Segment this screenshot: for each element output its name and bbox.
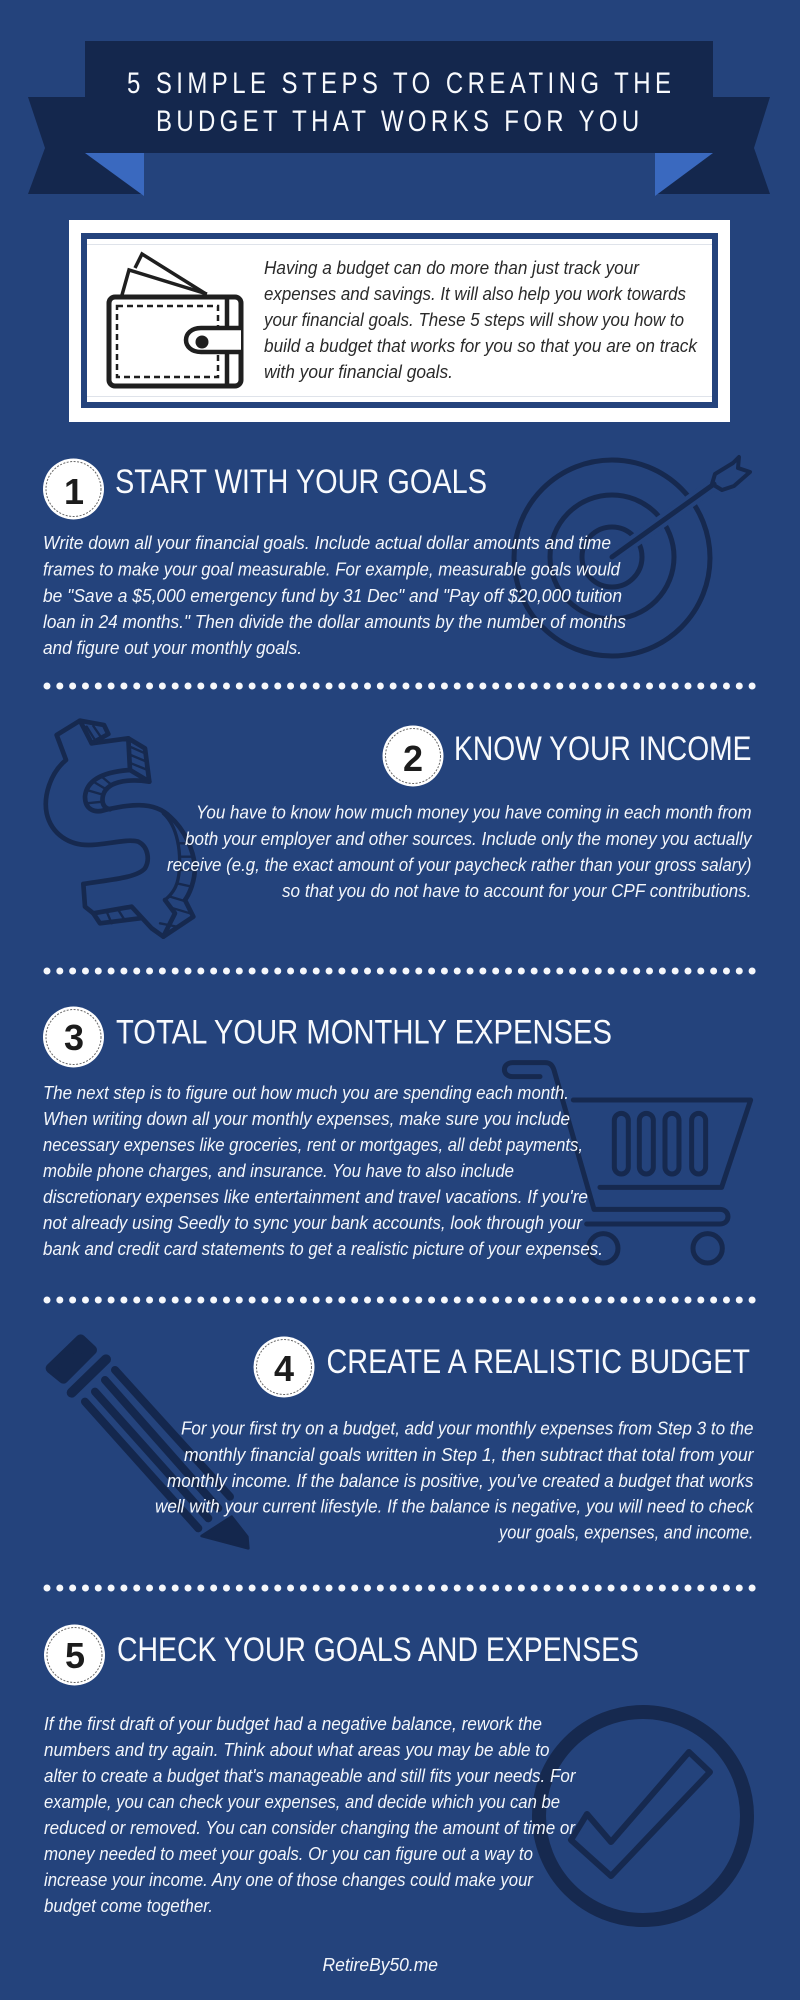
icon: pencil	[51, 1339, 248, 1548]
heading: CHECK YOUR GOALS AND EXPENSES	[117, 1631, 639, 1669]
body text: monthly financial goals written in Step 1, then subtract that total from your	[184, 1445, 754, 1465]
body text: alter to create a budget that's manageable and still fits your needs. For	[44, 1766, 576, 1786]
body text: increase your income. Any one of those changes could make your	[44, 1870, 534, 1890]
step number badge: 4	[274, 1348, 294, 1389]
body text: loan in 24 months." Then divide the dollar amounts by the number of months	[43, 612, 626, 632]
body text: You have to know how much money you have coming in each month from	[196, 802, 752, 822]
body text: mobile phone charges, and insurance. You have to also include	[43, 1161, 514, 1181]
body text: money needed to meet your goals. Or you can figure out a way to	[44, 1844, 533, 1864]
body text: If the first draft of your budget had a negative balance, rework the	[44, 1714, 542, 1734]
right ribbon wing	[655, 97, 770, 194]
body text: Write down all your financial goals. Include actual dollar amounts and time	[43, 533, 611, 553]
footer credit: RetireBy50.me	[322, 1955, 438, 1975]
main ribbon band	[85, 41, 713, 153]
panel: step 3	[43, 1006, 751, 1263]
intro text	[262, 258, 698, 382]
white card	[69, 220, 730, 422]
body text: When writing down all your monthly expenses, make sure you include	[43, 1109, 570, 1129]
body text: be "Save a $5,000 emergency fund by 31 Dec" and "Pay off $20,000 tuition	[43, 586, 622, 606]
body text: For your first try on a budget, add your monthly expenses from Step 3 to the	[181, 1418, 754, 1438]
intro text: with your financial goals.	[264, 362, 453, 382]
title text: 5 SIMPLE STEPS TO CREATING THE	[127, 65, 671, 100]
left ribbon wing	[28, 97, 144, 194]
step number badge: 3	[64, 1017, 84, 1058]
panel: step 5	[44, 1624, 747, 1920]
title banner	[28, 41, 770, 196]
icon: wallet	[109, 254, 241, 386]
blue frame	[84, 236, 715, 405]
intro text: your financial goals. These 5 steps will show you how to	[262, 310, 684, 330]
title text	[127, 65, 671, 138]
step number badge	[254, 1336, 314, 1398]
body text: monthly income. If the balance is positive, you've created a budget that works	[167, 1471, 754, 1491]
body text: and figure out your monthly goals.	[43, 638, 302, 658]
panel: step 2	[46, 721, 752, 937]
body text: so that you do not have to account for your CPF contributions.	[282, 881, 752, 901]
step number badge	[43, 458, 104, 520]
panel: step 1	[43, 457, 750, 658]
step number badge: 5	[65, 1635, 85, 1676]
step number badge	[382, 726, 444, 786]
body text	[167, 802, 752, 901]
intro text: Having a budget can do more than just track your	[264, 258, 640, 278]
body text: necessary expenses like groceries, rent or mortgages, all debt payments,	[43, 1135, 583, 1155]
heading: START WITH YOUR GOALS	[115, 463, 487, 501]
icon: check mark in circle	[539, 1712, 747, 1920]
left fold	[85, 153, 144, 196]
body text: numbers and try again. Think about what areas you may be able to	[44, 1740, 550, 1760]
body text	[155, 1418, 754, 1542]
body text: reduced or removed. You can consider changing the amount of time or	[44, 1818, 576, 1838]
body text: example, you can check your expenses, and decide which you can be	[44, 1792, 560, 1812]
intro text: build a budget that works for you so that you are on track	[264, 336, 698, 356]
body text: both your employer and other sources. Include only the money you actually	[185, 829, 752, 849]
heading: TOTAL YOUR MONTHLY EXPENSES	[116, 1014, 612, 1052]
icon: shopping cart	[504, 1063, 751, 1263]
step number badge	[44, 1624, 105, 1686]
intro text: expenses and savings. It will also help you work towards	[264, 284, 686, 304]
step number badge: 2	[403, 738, 423, 779]
body text: receive (e.g, the exact amount of your paycheck rather than your gross salary)	[167, 855, 752, 875]
step number badge	[43, 1006, 104, 1068]
body text: frames to make your goal measurable. For example, measurable goals would	[43, 560, 621, 580]
body text: your goals, expenses, and income.	[497, 1522, 754, 1542]
right fold	[655, 153, 713, 196]
panel: step 4	[51, 1336, 754, 1548]
step number badge: 1	[64, 471, 84, 512]
title text: BUDGET THAT WORKS FOR YOU	[156, 103, 639, 138]
body text: well with your current lifestyle. If the balance is negative, you will need to check	[155, 1496, 754, 1516]
icon: dollar sign	[46, 721, 195, 937]
body text: budget come together.	[44, 1896, 213, 1916]
icon: target with arrow	[514, 457, 750, 656]
body text	[43, 1083, 603, 1259]
body text	[44, 1714, 576, 1916]
body text: discretionary expenses like entertainment and travel vacations. If you're	[43, 1187, 588, 1207]
body text: The next step is to figure out how much you are spending each month.	[43, 1083, 569, 1103]
body text: not already using Seedly to sync your bank accounts, look through your	[43, 1213, 583, 1233]
panel: introduction	[69, 220, 730, 422]
body text	[43, 533, 626, 658]
body text: bank and credit card statements to get a realistic picture of your expenses.	[43, 1239, 603, 1259]
